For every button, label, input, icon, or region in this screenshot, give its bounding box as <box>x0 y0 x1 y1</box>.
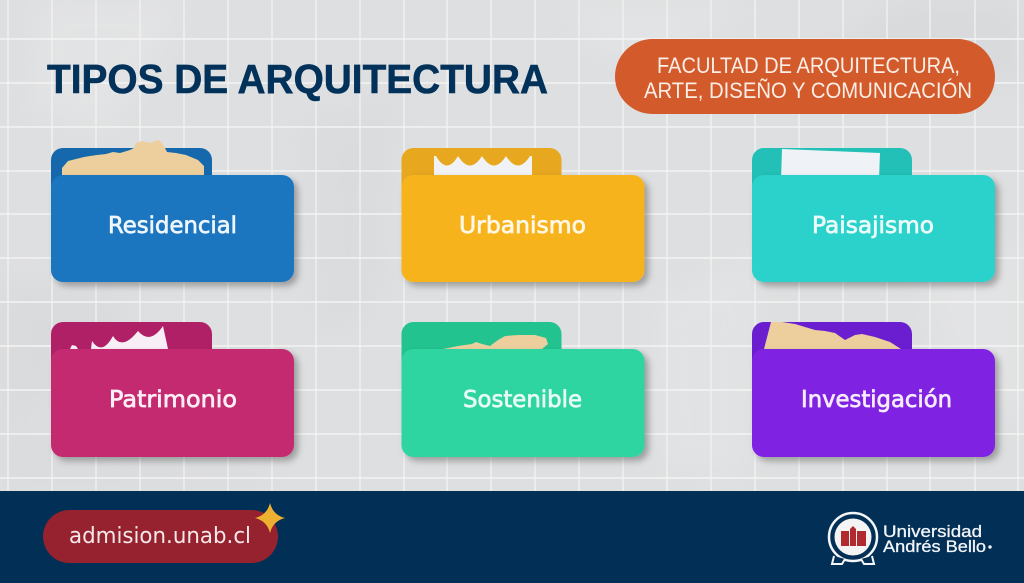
logo wordmark: Andrés Bello <box>883 537 986 556</box>
website pill <box>43 510 278 563</box>
folder: Residencial: Residencial <box>108 213 237 239</box>
folder: Paisajismo <box>752 148 995 282</box>
faculty badge: ARTE, DISEÑO Y COMUNICACIÓN <box>644 78 972 103</box>
faculty badge <box>615 39 995 114</box>
folder: Urbanismo: Urbanismo <box>459 213 586 239</box>
folder: Sostenible: Sostenible <box>463 387 582 413</box>
folder: Investigación <box>752 322 995 457</box>
folder: Investigación: Investigación <box>801 387 952 413</box>
folder: Patrimonio: Patrimonio <box>109 387 237 413</box>
folder: Urbanismo <box>402 148 644 282</box>
footer band <box>0 491 1024 583</box>
university logo <box>829 513 992 564</box>
title: TIPOS DE ARQUITECTURA <box>47 56 548 102</box>
folder: Sostenible <box>402 322 644 457</box>
logo wordmark <box>883 522 992 556</box>
website pill: admision.unab.cl <box>69 524 251 549</box>
icon: gold star <box>255 503 285 533</box>
folder: Residencial <box>51 140 294 282</box>
logo seal <box>829 513 877 564</box>
faculty badge: FACULTAD DE ARQUITECTURA, <box>657 53 960 78</box>
logo wordmark: Universidad <box>883 522 982 541</box>
folder: Paisajismo: Paisajismo <box>812 213 934 239</box>
folder: Patrimonio <box>51 322 294 457</box>
